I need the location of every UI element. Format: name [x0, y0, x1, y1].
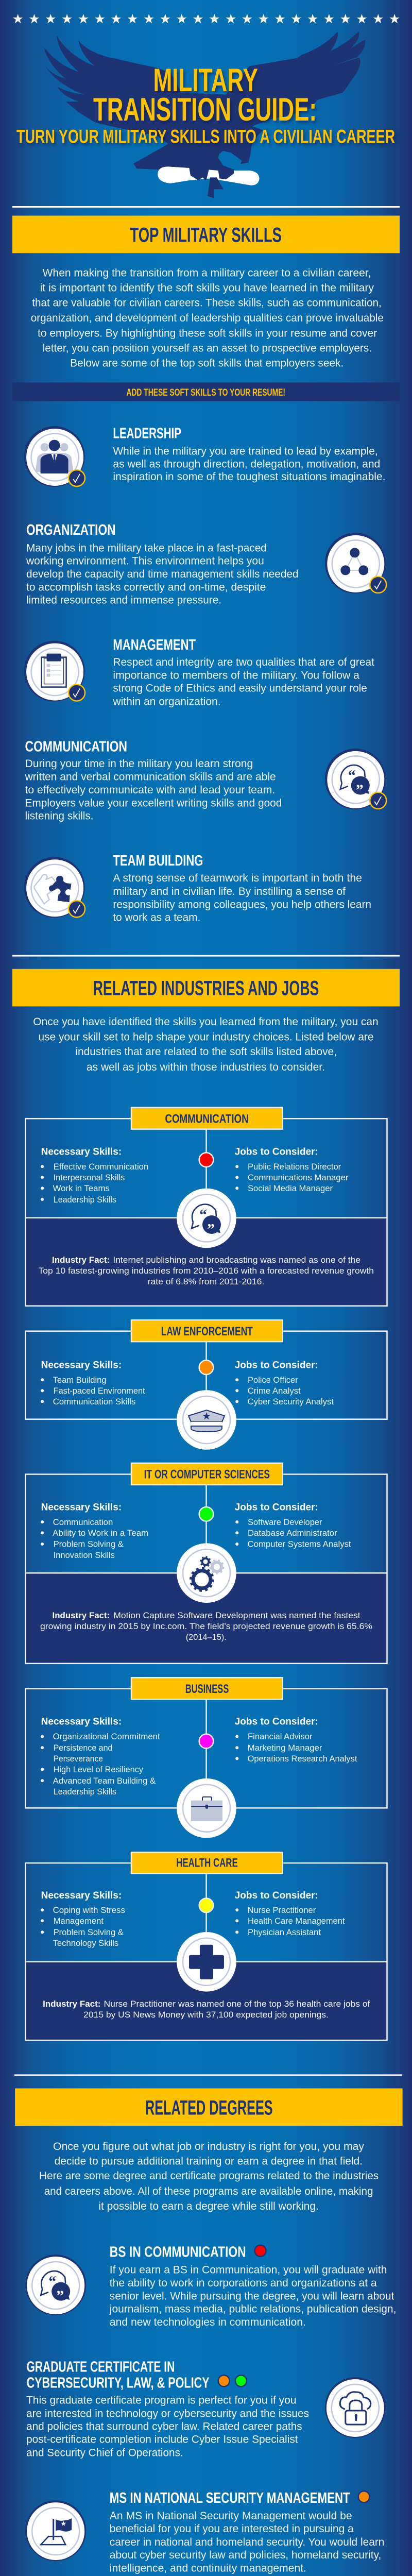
jobs to consider list	[235, 1717, 357, 1764]
necessary skills list: Persistence and	[54, 1743, 112, 1753]
heading: it or computer sciences	[131, 1463, 282, 1485]
heading: top military skills: TOP MILITARY SKILLS	[130, 224, 282, 246]
heading: communication industry	[131, 1108, 282, 1129]
text: organization: to accomplish tasks correctly and on-time, despite	[26, 581, 266, 593]
heading: team building: TEAM BUILDING	[113, 853, 203, 869]
jobs to consider list: Software Developer	[248, 1518, 322, 1527]
text: management: Respect and integrity are two qualities that are of great	[113, 656, 374, 668]
text block: degrees intro: decide to pursue additional training or earn a degree in that field.	[55, 2156, 363, 2167]
text block: degrees intro: and careers above. All of these programs are available online, making	[44, 2185, 373, 2197]
icon: eagle carrying diploma	[44, 31, 365, 198]
jobs to consider list	[235, 1147, 349, 1193]
heading: business	[131, 1677, 282, 1699]
text: graduate certificate: and policies that surround cyber law. Related career paths	[26, 2421, 302, 2433]
necessary skills list: Necessary Skills:	[41, 1717, 122, 1727]
text block: degrees intro: Once you figure out what job or industry is right for you, you may	[53, 2141, 364, 2153]
necessary skills list	[41, 1890, 125, 1948]
necessary skills list: Interpersonal Skills	[54, 1173, 125, 1182]
icon: management clipboard	[24, 641, 85, 702]
jobs to consider list: Jobs to Consider:	[235, 1147, 318, 1158]
panel: business	[26, 1677, 387, 1838]
industry fact: health care: 2015 by US News Money with 37,100 expected job openings.	[83, 2010, 329, 2020]
text: team building: to work as a team.	[113, 911, 200, 923]
jobs to consider list: Public Relations Director	[248, 1162, 341, 1172]
jobs to consider list: Police Officer	[248, 1376, 298, 1385]
necessary skills list: Leadership Skills	[54, 1787, 116, 1797]
color key dot: red	[199, 1153, 213, 1167]
icon: flag	[25, 2500, 86, 2561]
jobs to consider list: Nurse Practitioner	[248, 1906, 316, 1915]
jobs to consider list	[235, 1502, 351, 1549]
color key dots: orange and green	[218, 2375, 247, 2386]
panel: communication industry	[26, 1108, 387, 1306]
text block: industries intro: use your skill set to help shape your industry choices. Listed below are	[38, 1031, 374, 1043]
panel: communication skill	[24, 738, 386, 822]
text: team building: responsibility among colleagues, you help others learn	[113, 899, 371, 911]
text: bs in communication: senior level. While pursuing the degree, you will learn about	[110, 2290, 394, 2302]
icon: gears	[177, 1543, 236, 1603]
text: communication: listening skills.	[25, 810, 94, 822]
text: organization: Many jobs in the military take place in a fast-paced	[26, 542, 267, 554]
text: organization: working environment. This environment helps you	[26, 555, 264, 567]
icon: briefcase	[177, 1778, 236, 1838]
text: bs in communication: the ability to work in corporations and organizations at a	[110, 2277, 377, 2289]
jobs to consider list: Crime Analyst	[248, 1386, 301, 1396]
heading: management: MANAGEMENT	[113, 637, 196, 653]
industry fact: it: Motion Capture Software Development was named the fastest	[113, 1611, 360, 1620]
heading: related degrees	[15, 2089, 403, 2126]
text: organization: develop the capacity and time management skills needed	[26, 568, 299, 580]
icon: speech bubbles: “	[348, 767, 356, 784]
heading: related industries and jobs	[12, 969, 400, 1006]
text block: skills intro: organization, and development of leadership qualities can prove invaluable	[31, 312, 384, 324]
text: graduate certificate: This graduate certificate program is perfect for you if you	[26, 2394, 297, 2406]
color key dot: yellow	[199, 1898, 213, 1912]
text: bs in communication: If you earn a BS in Communication, you will graduate with	[110, 2264, 387, 2276]
heading: leadership: LEADERSHIP	[113, 425, 181, 442]
color key dot: red	[255, 2245, 266, 2257]
jobs to consider list: Jobs to Consider:	[235, 1360, 318, 1371]
text: ms national security	[110, 2510, 384, 2574]
text block: degrees intro	[39, 2141, 379, 2212]
industry fact: communication: Top 10 fastest-growing industries from 2010–2016 with a forecasted revenue growth	[38, 1266, 374, 1276]
text: leadership: as well as through direction, delegation, motivation, and	[113, 459, 380, 470]
text block: degrees intro: Here are some degree and certificate programs related to the industries	[39, 2170, 379, 2182]
text block: skills intro	[31, 267, 384, 369]
industry fact: it: Industry Fact:	[53, 1611, 110, 1620]
text: bs in communication: journalism, mass media, public relations, publication design,	[109, 2303, 396, 2315]
jobs to consider list: Computer Systems Analyst	[248, 1540, 351, 1549]
text block: skills intro: it is important to identify the soft skills you have learned in the military	[40, 282, 374, 294]
text: ms national security: about cyber security law and policies, homeland security,	[110, 2549, 381, 2561]
icon: cloud lock	[325, 2377, 386, 2438]
text block: industries intro: as well as jobs within those industries to consider.	[87, 1061, 325, 1073]
jobs to consider list: Social Media Manager	[248, 1184, 333, 1193]
necessary skills list: Management	[54, 1917, 104, 1926]
jobs to consider list: Financial Advisor	[248, 1732, 313, 1741]
text: communication: During your time in the military you learn strong	[25, 758, 253, 770]
text block: skills intro: to employers. By highlighting these soft skills in your resume and cover	[38, 328, 377, 340]
necessary skills list: Effective Communication	[54, 1162, 148, 1172]
heading: health care	[131, 1852, 282, 1873]
text: graduate certificate	[26, 2394, 309, 2459]
heading: law enforcement	[131, 1320, 282, 1342]
text: communication: Employers value your excellent writing skills and good	[25, 797, 282, 809]
industry fact: health care: Industry Fact:	[43, 1999, 100, 2009]
necessary skills list: Necessary Skills:	[41, 1360, 122, 1371]
text: ms national security: An MS in National Security Management would be	[110, 2510, 352, 2522]
icon: puzzle pieces	[24, 857, 85, 918]
icon: police cap	[177, 1390, 236, 1450]
text: communication: written and verbal communication skills and are able	[24, 771, 276, 783]
title	[16, 62, 395, 147]
panel: leadership	[24, 425, 386, 487]
panel: ms national security	[25, 2490, 384, 2574]
industry fact: it	[40, 1611, 372, 1642]
text block: industries intro	[33, 1016, 379, 1073]
heading: top military skills	[12, 216, 400, 253]
necessary skills list: Perseverance	[54, 1754, 103, 1764]
jobs to consider list: Operations Research Analyst	[248, 1754, 357, 1764]
heading: it or computer sciences: IT OR COMPUTER SCIENCES	[144, 1467, 270, 1482]
color key dot: orange	[199, 1360, 213, 1375]
necessary skills list	[41, 1717, 160, 1797]
jobs to consider list: Jobs to Consider:	[235, 1717, 318, 1727]
text: ms national security: intelligence, and continuity management.	[110, 2562, 306, 2574]
industry fact: communication: rate of 6.8% from 2011-2016.	[148, 1277, 264, 1286]
text: graduate certificate: and Security Chief of Operations.	[26, 2447, 183, 2459]
panel: management	[24, 637, 374, 707]
jobs to consider list: Jobs to Consider:	[235, 1890, 318, 1901]
necessary skills list	[41, 1502, 148, 1560]
icon: speech bubbles	[177, 1189, 236, 1248]
necessary skills list: Coping with Stress	[53, 1906, 125, 1915]
text: leadership	[113, 445, 385, 483]
jobs to consider list: Cyber Security Analyst	[248, 1397, 334, 1406]
text: management	[112, 656, 374, 707]
icon: speech bubbles: “	[199, 1206, 207, 1223]
icon: medical cross	[177, 1932, 236, 1992]
title: MILITARY	[153, 62, 258, 98]
panel: it or computer sciences	[26, 1463, 387, 1664]
necessary skills list: Organizational Commitment	[53, 1732, 160, 1741]
heading: organization: ORGANIZATION	[26, 522, 115, 538]
text: management: importance to members of the military. You follow a	[113, 670, 359, 681]
necessary skills list: Problem Solving &	[54, 1928, 124, 1937]
necessary skills list: Communication Skills	[53, 1397, 135, 1406]
text block: skills intro: Below are some of the top soft skills that employers seek.	[70, 358, 344, 369]
panel: organization	[26, 522, 386, 606]
heading: law enforcement: LAW ENFORCEMENT	[161, 1325, 253, 1338]
text block: degrees intro: it possible to earn a degree while still working.	[98, 2200, 319, 2212]
banner: add these soft skills: ADD THESE SOFT SKILLS TO YOUR RESUME!	[126, 387, 285, 398]
panel: bs in communication	[25, 2244, 396, 2328]
text: communication	[24, 758, 282, 822]
text block: industries intro: Once you have identified the skills you learned from the military, you can	[33, 1016, 379, 1028]
heading: related degrees: RELATED DEGREES	[145, 2096, 273, 2119]
icon: speech bubbles: “	[48, 2273, 56, 2290]
text: ms national security: beneficial for you if you are interested in pursuing a	[110, 2523, 354, 2535]
text: organization: limited resources and immense pressure.	[26, 594, 221, 606]
industry fact: communication	[38, 1256, 374, 1286]
color key dot: orange	[358, 2491, 370, 2502]
icon: speech bubbles	[25, 2255, 86, 2315]
necessary skills list: Technology Skills	[53, 1939, 118, 1948]
jobs to consider list: Jobs to Consider:	[235, 1502, 318, 1513]
icon: speech bubbles: ”	[207, 1221, 215, 1238]
icon: speech bubbles	[325, 749, 386, 809]
jobs to consider list: Health Care Management	[248, 1917, 345, 1926]
heading: graduate certificate: GRADUATE CERTIFICATE IN	[27, 2359, 175, 2375]
title: TRANSITION GUIDE:	[93, 92, 317, 128]
industry fact: communication: Internet publishing and broadcasting was named as one of the	[113, 1256, 360, 1265]
necessary skills list	[41, 1360, 145, 1406]
text block: skills intro: letter, you can position yourself as an asset to prospective employers.	[43, 342, 372, 354]
icon: leadership	[24, 426, 85, 487]
text: ms national security: career in national and homeland security. You would learn	[110, 2536, 384, 2548]
industry fact: it: growing industry in 2015 by Inc.com. The field’s projected revenue growth is 65.6%	[40, 1622, 372, 1631]
jobs to consider list: Database Administrator	[248, 1529, 337, 1538]
necessary skills list: Communication	[53, 1518, 113, 1527]
industry fact: health care: Nurse Practitioner was named one of the top 36 health care jobs of	[104, 1999, 370, 2009]
text: team building: A strong sense of teamwork is important in both the	[113, 872, 362, 884]
necessary skills list: Advanced Team Building &	[53, 1776, 156, 1786]
panel: law enforcement	[26, 1320, 387, 1450]
panel: team building	[24, 853, 371, 923]
jobs to consider list	[235, 1890, 345, 1937]
text: organization	[26, 542, 299, 606]
heading: bs in communication: BS IN COMMUNICATION	[110, 2244, 246, 2261]
necessary skills list: Leadership Skills	[54, 1195, 116, 1205]
text: management: within an organization.	[112, 696, 221, 707]
text: team building	[113, 872, 371, 923]
necessary skills list: Necessary Skills:	[41, 1502, 122, 1513]
text: leadership: inspiration in some of the toughest situations imaginable.	[113, 471, 385, 483]
banner: add these soft skills	[12, 382, 400, 401]
heading: communication: COMMUNICATION	[25, 738, 127, 755]
necessary skills list: Fast-paced Environment	[54, 1386, 145, 1396]
industry fact: it: (2014–15).	[186, 1633, 227, 1642]
text: graduate certificate: post-certificate completion include Cyber Issue Specialist	[26, 2434, 298, 2445]
heading: health care: HEALTH CARE	[176, 1856, 238, 1870]
jobs to consider list: Communications Manager	[248, 1173, 349, 1182]
color key dot: green	[199, 1507, 213, 1521]
text block: skills intro: that are valuable for civilian careers. These skills, such as communication,	[32, 297, 382, 309]
heading: graduate certificate	[27, 2359, 210, 2391]
industry fact: communication: Industry Fact:	[52, 1256, 110, 1265]
heading: communication industry: COMMUNICATION	[165, 1112, 249, 1126]
text: management: strong Code of Ethics and easily understand your role	[113, 683, 367, 694]
text: bs in communication: and new technologies in communication.	[110, 2316, 306, 2328]
stars row	[13, 14, 400, 23]
text: graduate certificate: are interested in technology or cybersecurity and the issues	[26, 2408, 309, 2419]
panel: health care	[26, 1852, 387, 2040]
necessary skills list: Innovation Skills	[54, 1551, 115, 1560]
jobs to consider list: Marketing Manager	[248, 1743, 322, 1753]
necessary skills list: Necessary Skills:	[41, 1890, 122, 1901]
necessary skills list: Work in Teams	[53, 1184, 110, 1193]
color key dot: magenta	[199, 1734, 213, 1748]
heading: graduate certificate: CYBERSECURITY, LAW, & POLICY	[27, 2375, 210, 2391]
text: communication: to effectively communicate with and lead your team.	[25, 784, 275, 796]
necessary skills list	[41, 1147, 148, 1205]
panel: graduate certificate	[26, 2359, 386, 2459]
heading: business: BUSINESS	[185, 1682, 229, 1696]
jobs to consider list: Physician Assistant	[248, 1928, 321, 1937]
necessary skills list: Ability to Work in a Team	[53, 1529, 148, 1538]
text: leadership: While in the military you are trained to lead by example,	[113, 445, 378, 457]
icon: speech bubbles: ”	[356, 782, 364, 799]
icon: organization network	[325, 533, 386, 594]
necessary skills list: Problem Solving &	[54, 1540, 124, 1549]
industry fact: health care	[43, 1999, 370, 2020]
necessary skills list: Necessary Skills:	[41, 1147, 122, 1158]
text block: skills intro: When making the transition from a military career to a civilian career,	[43, 267, 371, 279]
jobs to consider list	[235, 1360, 334, 1406]
icon: speech bubbles: ”	[56, 2287, 64, 2304]
necessary skills list: Team Building	[53, 1376, 107, 1385]
text block: industries intro: industries that are related to the soft skills listed above,	[75, 1046, 337, 1058]
text: bs in communication	[109, 2264, 396, 2328]
necessary skills list: High Level of Resiliency	[54, 1765, 144, 1774]
text: team building: military and in civilian life. By instilling a sense of	[113, 886, 346, 897]
